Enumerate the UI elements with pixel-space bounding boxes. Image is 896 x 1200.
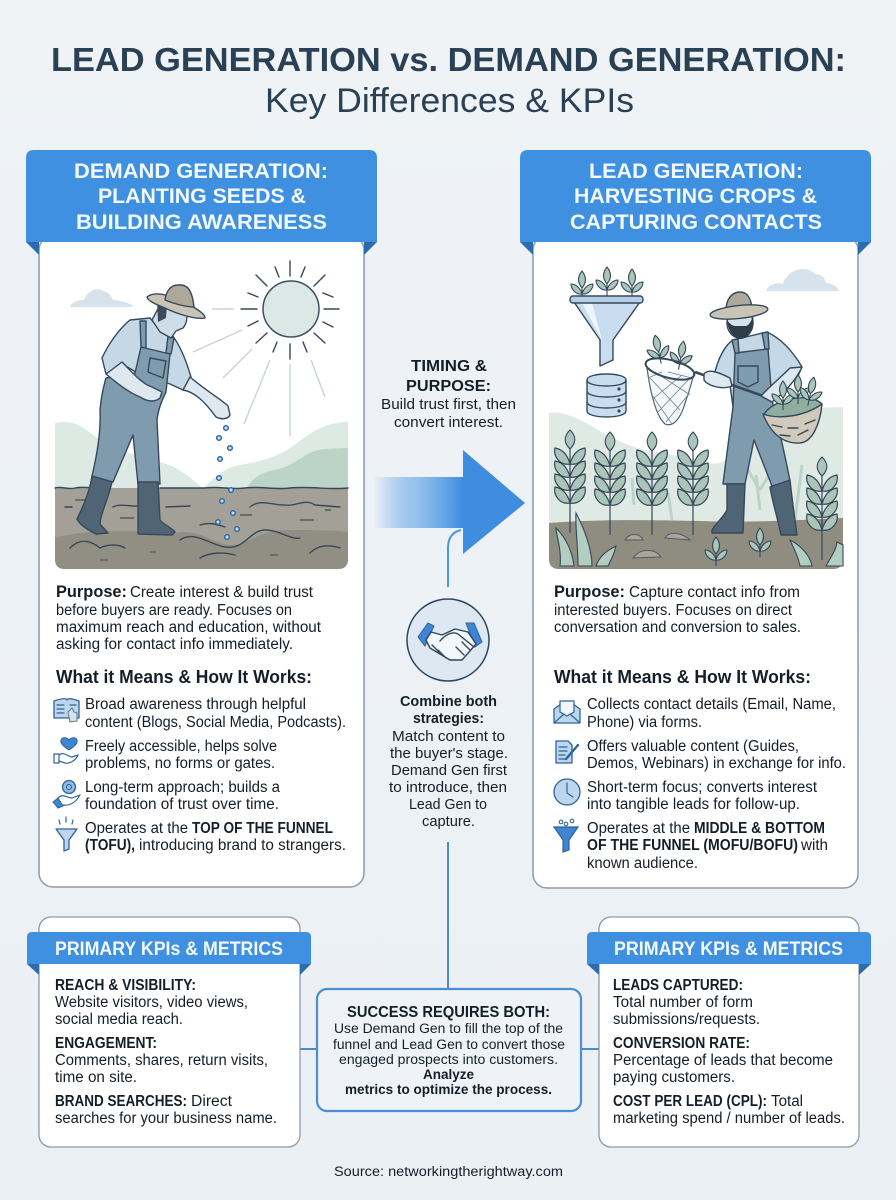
KPI text: time on site. [55,1069,137,1086]
panel: lead KPIs [587,917,871,1147]
item: short-term focus [554,779,818,813]
KPI text: searches for your business name. [55,1110,277,1127]
ribbon header: CAPTURING CONTACTS [570,210,822,234]
KPI header [587,932,871,975]
boots [712,484,745,533]
KPI text: BRAND SEARCHES: [55,1093,187,1110]
item: middle and bottom of funnel [554,819,828,872]
item: middle and bottom of funnel: OF THE FUNNEL (MOFU/BOFU) [587,837,798,854]
seeds [216,426,239,539]
KPI text: CONVERSION RATE: [613,1035,750,1052]
cloud [766,269,839,291]
item: collects contact details: Collects contact details (Email, Name, [587,696,836,713]
combine both strategies text: strategies: [413,711,484,727]
overalls [92,347,170,484]
ribbon header [26,150,377,255]
item: offers valuable content [556,738,846,772]
heading: what it means: What it Means & How It Works: [554,666,811,687]
callout: success requires both: Analyze [423,1067,474,1082]
KPI text: Website visitors, video views, [55,994,248,1011]
KPI text: Comments, shares, return visits, [55,1052,268,1069]
head [152,305,188,338]
KPI text: marketing spend / number of leads. [613,1110,845,1127]
timing and purpose text: convert interest. [394,415,503,431]
shirt [714,332,802,407]
purpose text: Purpose: [554,583,625,601]
boots [77,476,112,534]
net with leaves [644,333,803,425]
right arm sleeve and torso shirt [102,318,191,390]
KPI text: paying customers. [613,1069,735,1086]
title: LEAD GENERATION vs. DEMAND GENERATION: [51,42,846,79]
KPI card [599,917,859,1147]
item: broad awareness [54,696,346,731]
database [587,374,626,417]
sun [193,261,339,436]
icon: handshake [407,599,489,681]
KPI header [27,932,311,975]
KPI text: ENGAGEMENT: [55,1035,157,1052]
item: long-term approach: Long-term approach; builds a [85,779,280,796]
KPI text [55,977,277,1127]
KPI text: Percentage of leads that become [613,1052,833,1069]
purpose text: Capture contact info from [629,584,800,601]
item: collects contact details [554,696,836,731]
hills [55,422,203,488]
left forearm and hand [106,362,162,401]
source: Source: networkingtherightway.com [334,1164,563,1179]
purpose text: Purpose: [56,583,127,601]
hat [147,294,205,318]
head [727,308,753,338]
KPI text: REACH & VISIBILITY: [55,977,196,994]
purpose text: maximum reach and education, without [56,619,322,636]
card body [39,236,364,887]
item: short-term focus: into tangible leads for follow-up. [587,796,800,813]
cloud [70,289,133,307]
item: freely accessible: Freely accessible, helps solve [85,738,277,755]
ribbon header: DEMAND GENERATION: [74,159,328,183]
connector lines [300,842,599,1049]
background sprouts [632,465,802,520]
KPI card [39,917,300,1147]
KPI text: COST PER LEAD (CPL): [613,1093,767,1110]
KPI text: social media reach. [55,1011,183,1028]
ribbon header: PLANTING SEEDS & [98,184,306,208]
connector: arrow to handshake [448,530,461,587]
farmer [709,292,802,535]
item: middle and bottom of funnel: Operates at the [587,820,690,837]
small sprouts [705,537,727,566]
purpose text: asking for contact info immediately. [56,636,293,653]
item: top of the funnel: introducing brand to strangers. [139,837,346,854]
item: collects contact details: Phone) via forms. [587,714,702,731]
title [51,42,846,120]
item: top of the funnel [56,817,346,854]
callout: success requires both: Use Demand Gen to fill the top of the [334,1021,563,1036]
combine both strategies text: Match content to [392,729,505,745]
title: Key Differences & KPIs [265,82,634,120]
basket [763,375,825,443]
KPI text: submissions/requests. [613,1011,760,1028]
item: top of the funnel: (TOFU), [85,837,135,854]
combine both strategies text [389,694,508,830]
item: top of the funnel: TOP OF THE FUNNEL [192,820,333,837]
KPI header: PRIMARY KPIs & METRICS [614,939,843,960]
ribbon header: LEAD GENERATION: [589,159,803,183]
combine both strategies text: Demand Gen first [391,763,507,779]
purpose text [554,583,801,636]
combine both strategies text: capture. [422,814,475,830]
item: long-term approach [53,779,280,813]
item: freely accessible [54,738,277,772]
item: broad awareness: Broad awareness through helpful [85,696,306,713]
purpose text: interested buyers. Focuses on direct [554,602,793,619]
purpose text: Create interest & build trust [130,584,314,601]
hat [726,292,752,310]
illustration: farmer harvesting [549,267,843,569]
KPI text: Total number of form [613,994,753,1011]
callout: success requires both: funnel and Lead Gen to convert those [333,1037,565,1052]
combine both strategies text: to introduce, then [389,780,507,796]
farmer hands on handle [704,367,802,402]
hill [549,407,843,525]
card body [533,236,858,888]
item: offers valuable content: Demos, Webinars) in exchange for info. [587,755,846,772]
item: short-term focus: Short-term focus; converts interest [587,779,818,796]
ribbon header: HARVESTING CROPS & [574,184,817,208]
right forearm and hand [183,377,230,419]
panel: demand generation [26,150,377,887]
panel: demand KPIs [27,917,311,1147]
item: top of the funnel: Operates at the [85,820,188,837]
item: broad awareness: content (Blogs, Social Media, Podcasts). [85,714,346,731]
ribbon header [520,150,871,255]
panel: lead generation [520,150,871,888]
KPI text: LEADS CAPTURED: [613,977,743,994]
illustration: farmer planting seeds [55,261,348,569]
callout: success requires both: SUCCESS REQUIRES BOTH: [347,1004,550,1021]
item: offers valuable content: Offers valuable content (Guides, [587,738,799,755]
purpose text: before buyers are ready. Focuses on [56,602,292,619]
funnel [570,267,643,366]
timing and purpose text: Build trust first, then [381,397,516,413]
purpose text [56,583,322,653]
item: long-term approach: foundation of trust over time. [85,796,279,813]
item: freely accessible: problems, no forms or gates. [85,755,275,772]
overalls [723,349,790,486]
soil [55,488,348,569]
ribbon header: BUILDING AWARENESS [76,210,327,234]
item: middle and bottom of funnel: known audience. [587,855,698,872]
timing and purpose text: PURPOSE: [406,378,491,395]
callout: success requires both: metrics to optimize the process. [345,1082,552,1097]
KPI header: PRIMARY KPIs & METRICS [55,939,283,960]
callout: success requires both [317,989,581,1111]
KPI text: Total [771,1093,803,1110]
rocks [625,533,690,558]
KPI text [613,977,845,1127]
farmer [77,285,230,535]
callout: success requires both: engaged prospects into customers. [339,1052,558,1067]
soil [549,518,843,569]
crop rows [555,430,837,560]
item: middle and bottom of funnel: with [800,837,828,854]
item: middle and bottom of funnel: MIDDLE & BOTTOM [694,820,825,837]
grass [556,513,843,566]
heading: what it means: What it Means & How It Works: [56,666,312,687]
purpose text: conversation and conversion to sales. [554,619,801,636]
KPI text: Direct [191,1093,233,1110]
combine both strategies text: Combine both [400,694,497,710]
timing and purpose text: TIMING & [411,358,487,375]
combine both strategies text: the buyer's stage. [390,746,508,762]
arrow [373,450,525,554]
combine both strategies text: Lead Gen to [409,797,487,813]
timing and purpose text [381,358,516,431]
